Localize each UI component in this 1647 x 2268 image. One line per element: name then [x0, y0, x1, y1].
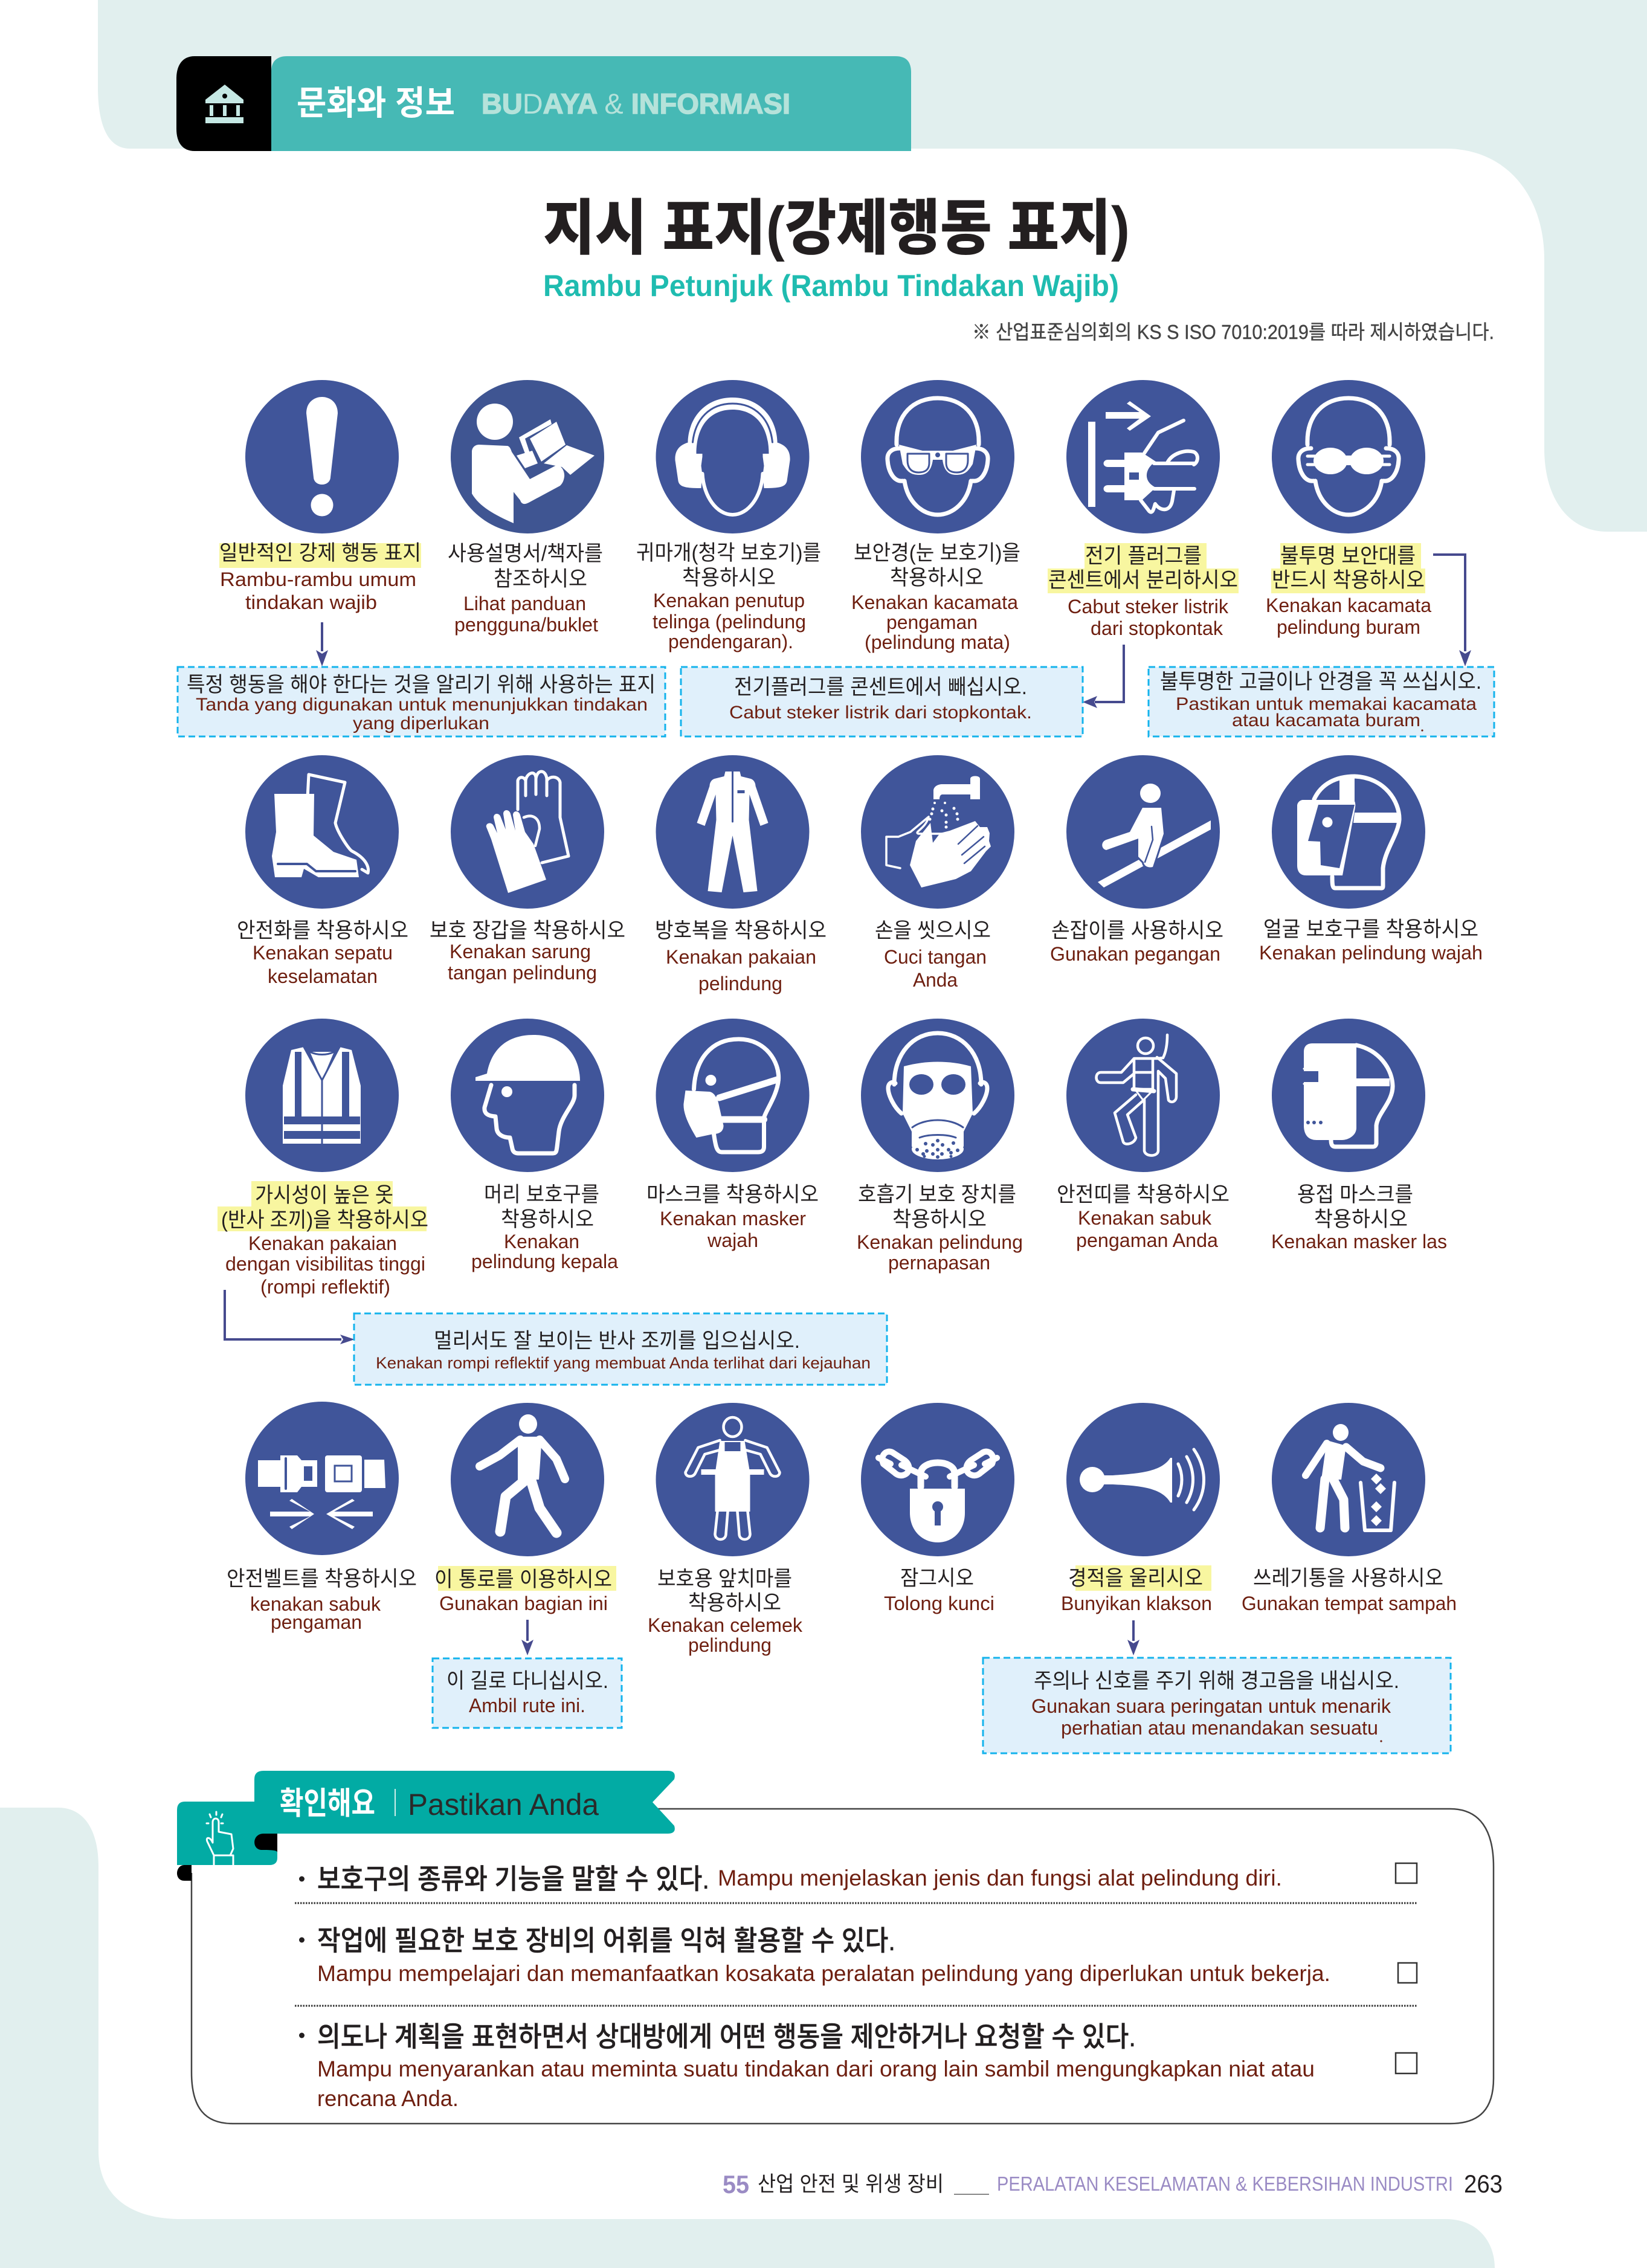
label: Kenakan pelindung wajah — [1259, 942, 1483, 964]
label: 마스크를 착용하시오 — [646, 1183, 819, 1206]
sign: use handrail — [1050, 755, 1223, 965]
label: 귀마개(청각 보호기)를 — [636, 541, 821, 565]
icon: face shield — [1272, 755, 1425, 909]
label: 착용하시오 — [682, 566, 776, 590]
sign: protective clothing — [655, 755, 827, 994]
checklist ribbon — [254, 1771, 675, 1834]
label: Gunakan tempat sampah — [1242, 1593, 1457, 1614]
label: (반사 조끼)을 착용하시오 — [221, 1208, 428, 1232]
arrow: opaque goggles to note — [1433, 555, 1471, 666]
icon: apron — [656, 1403, 810, 1556]
label: dengan visibilitas tinggi — [225, 1253, 425, 1275]
callout: unplug: 전기플러그를 콘센트에서 빼십시오. — [734, 675, 1027, 699]
label — [1050, 919, 1223, 965]
label: pelindung — [698, 973, 782, 994]
label: Kenakan sarung — [450, 941, 591, 962]
label: 착용하시오 — [688, 1591, 781, 1615]
label: pelindung — [688, 1634, 772, 1656]
footer: 55 — [723, 2170, 749, 2199]
label: 사용설명서/책자를 — [448, 542, 603, 565]
label: Kenakan — [504, 1231, 579, 1252]
icon: gas mask — [861, 1019, 1014, 1172]
label: 머리 보호구를 — [484, 1183, 599, 1206]
label: Kenakan masker las — [1271, 1231, 1447, 1252]
label — [851, 541, 1020, 653]
label highlight — [218, 1181, 427, 1231]
callout: horn: perhatian atau menandakan sesuatu — [1061, 1717, 1378, 1739]
sign: face protection — [1259, 755, 1483, 964]
label: Lihat panduan — [463, 593, 586, 614]
arrow: general sign to note — [316, 622, 328, 666]
label — [227, 1567, 417, 1633]
label highlight — [438, 1566, 616, 1591]
label: pendengaran). — [668, 631, 793, 652]
label: Kenakan pakaian — [248, 1232, 397, 1254]
icon: horn — [1066, 1403, 1220, 1556]
section title korean: 문화와 정보 — [297, 84, 455, 122]
callout: walkway: 이 길로 다니십시오. — [446, 1669, 608, 1693]
label — [1266, 544, 1431, 638]
label: tindakan wajib — [245, 591, 377, 613]
icon: reflective vest — [245, 1019, 399, 1172]
icon: person using trash bin — [1272, 1403, 1425, 1556]
label: 가시성이 높은 옷 — [255, 1184, 393, 1207]
callout: unplug: Cabut steker listrik dari stopkontak. — [729, 703, 1032, 723]
sign: high visibility clothing — [218, 1019, 428, 1298]
callout: opaque goggles: 불투명한 고글이나 안경을 꼭 쓰십시오. — [1160, 670, 1481, 694]
label — [471, 1183, 618, 1272]
label — [1259, 918, 1483, 964]
label: 안전띠를 착용하시오 — [1057, 1183, 1230, 1206]
callout: horn: Gunakan suara peringatan untuk menarik — [1031, 1695, 1391, 1717]
sign: lock — [861, 1403, 1014, 1614]
section header tab — [176, 56, 911, 151]
label: 콘센트에서 분리하시오 — [1048, 569, 1238, 592]
icon: exclamation mark — [245, 380, 399, 533]
panel: checklist — [177, 1771, 1494, 2124]
label — [434, 1568, 612, 1614]
label — [1271, 1183, 1447, 1252]
label: pengaman — [271, 1611, 362, 1633]
callout: walkway — [433, 1658, 622, 1728]
icon: hard hat — [451, 1019, 604, 1172]
label: kenakan sabuk — [250, 1593, 381, 1615]
callout: visibility: 멀리서도 잘 보이는 반사 조끼를 입으십시오. — [434, 1329, 800, 1353]
section title indonesian: BUDAYA & INFORMASI — [482, 88, 790, 120]
callout: visibility — [354, 1313, 887, 1385]
callout: visibility: Kenakan rompi reflektif yang membuat Anda terlihat dari kejauhan — [376, 1354, 871, 1372]
label — [875, 919, 991, 991]
label: Kenakan sabuk — [1078, 1207, 1212, 1229]
label — [221, 1184, 428, 1298]
background: top and right tint — [98, 0, 1647, 532]
label: 손잡이를 사용하시오 — [1051, 919, 1223, 942]
icon: face mask — [656, 1019, 810, 1172]
sign: use this walkway — [434, 1403, 616, 1614]
background: bottom and left tint — [0, 1808, 1495, 2268]
label: pengaman — [886, 611, 978, 633]
checklist item 3: Mampu menyarankan atau meminta suatu tindakan dari orang lain sambil mengungkapkan niat atau — [317, 2057, 1315, 2081]
label: 일반적인 강제 행동 표지 — [219, 541, 421, 565]
label: 손을 씻으시오 — [875, 919, 991, 942]
label — [430, 919, 625, 984]
checklist item 2: 작업에 필요한 보호 장비의 어휘를 익혀 활용할 수 있다. — [317, 1925, 895, 1956]
sign: respiratory protection — [857, 1019, 1023, 1274]
callout: opaque goggles: Pastikan untuk memakai kacamata — [1176, 694, 1477, 714]
icon: hand pulling plug from socket — [1066, 380, 1220, 533]
label — [448, 542, 603, 636]
label: 이 통로를 이용하시오 — [434, 1568, 612, 1591]
label — [648, 1567, 803, 1656]
sign: eye protection — [851, 380, 1020, 653]
label: 용접 마스크를 — [1297, 1183, 1413, 1206]
label: Gunakan bagian ini — [439, 1593, 608, 1614]
label: 보안경(눈 보호기)을 — [854, 541, 1020, 565]
label: Cabut steker listrik — [1068, 596, 1229, 617]
label: pengguna/buklet — [454, 614, 598, 636]
label: dari stopkontak — [1091, 617, 1223, 639]
label: wajah — [707, 1229, 758, 1251]
label: Cuci tangan — [884, 946, 987, 968]
checklist item 3: rencana Anda. — [317, 2086, 459, 2111]
callout: opaque goggles: atau kacamata buram — [1232, 710, 1420, 730]
sign: head protection — [451, 1019, 618, 1272]
label: (rompi reflektif) — [260, 1276, 390, 1298]
label: 참조하시오 — [494, 567, 587, 591]
label — [655, 919, 827, 994]
label: pelindung kepala — [471, 1251, 618, 1272]
label: keselamatan — [268, 965, 378, 987]
label: Kenakan masker — [660, 1208, 806, 1229]
arrow: horn to note — [1127, 1620, 1139, 1655]
label: 착용하시오 — [890, 566, 984, 590]
checklist ribbon: 확인해요 — [280, 1786, 375, 1822]
label: 착용하시오 — [892, 1208, 987, 1231]
label: 착용하시오 — [1314, 1208, 1408, 1231]
label: Kenakan penutup — [653, 590, 805, 611]
label — [1057, 1183, 1230, 1251]
callout: horn — [983, 1658, 1451, 1753]
label highlight — [1271, 543, 1425, 593]
sign: welding mask — [1271, 1019, 1447, 1252]
label: (pelindung mata) — [865, 631, 1010, 653]
label: 안전화를 착용하시오 — [237, 919, 408, 942]
label: 안전벨트를 착용하시오 — [227, 1567, 417, 1591]
label: pernapasan — [888, 1252, 990, 1274]
label: 반드시 착용하시오 — [1272, 569, 1425, 592]
icon: opaque goggles — [1272, 380, 1425, 533]
icon: padlock and chain — [861, 1403, 1014, 1556]
callout: general sign: 특정 행동을 해야 한다는 것을 알리기 위해 사용하는 표지 — [187, 673, 656, 697]
label: 잠그시오 — [900, 1567, 974, 1590]
sign: protective apron — [648, 1403, 810, 1656]
sign: safety harness — [1057, 1019, 1230, 1251]
arrow: walkway to note — [521, 1620, 533, 1655]
icon: harness — [1066, 1019, 1220, 1172]
label — [1242, 1567, 1457, 1614]
icon: boot — [245, 755, 399, 909]
label: Rambu-rambu umum — [220, 569, 416, 590]
label: 전기 플러그를 — [1085, 544, 1202, 568]
icon: hand washing — [861, 755, 1014, 909]
icon: welding mask — [1272, 1019, 1425, 1172]
sign: mask — [646, 1019, 819, 1251]
label: Kenakan pelindung — [857, 1231, 1023, 1253]
label — [636, 541, 821, 652]
callout: walkway: Ambil rute ini. — [469, 1695, 585, 1716]
label: telinga (pelindung — [653, 611, 806, 633]
icon: museum on black tab — [176, 56, 271, 151]
sign: ear protection — [636, 380, 821, 652]
callout: general sign — [178, 667, 665, 736]
label highlight — [219, 543, 421, 568]
footer: 263 — [1464, 2170, 1503, 2198]
checklist item 1: 보호구의 종류와 기능을 말할 수 있다. — [317, 1863, 709, 1895]
label: 착용하시오 — [501, 1208, 594, 1231]
label: Kenakan pakaian — [666, 946, 816, 968]
sign: seat belt — [227, 1402, 417, 1633]
icon: person reading book — [451, 380, 604, 533]
label: 얼굴 보호구를 착용하시오 — [1263, 918, 1478, 941]
sign: wash hands — [861, 755, 1014, 991]
label: 불투명 보안대를 — [1280, 544, 1416, 568]
label: Anda — [913, 969, 958, 991]
label: pengaman Anda — [1076, 1229, 1218, 1251]
sign: opaque eye protection — [1266, 380, 1431, 638]
label — [646, 1183, 819, 1251]
panel outline — [192, 1809, 1494, 2124]
subtitle: Rambu Petunjuk (Rambu Tindakan Wajib) — [543, 269, 1119, 303]
label: Kenakan kacamata — [851, 591, 1018, 613]
label: 호흡기 보호 장치를 — [858, 1183, 1016, 1206]
footer — [723, 2170, 1503, 2199]
checklist tab with hand icon — [177, 1802, 277, 1881]
checklist item 2 — [299, 1925, 1417, 1986]
icon: walking person — [451, 1403, 604, 1556]
label: Tolong kunci — [884, 1593, 994, 1614]
label: 방호복을 착용하시오 — [655, 919, 827, 942]
label — [237, 919, 408, 987]
sign: read manual — [448, 380, 604, 636]
icon: safety goggles — [861, 380, 1014, 533]
label — [1061, 1567, 1212, 1614]
icon: seat belt — [245, 1402, 399, 1555]
checklist item 3 — [299, 2021, 1417, 2111]
footer: 산업 안전 및 위생 장비 — [758, 2173, 944, 2196]
label — [857, 1183, 1023, 1274]
callout: unplug — [681, 667, 1083, 736]
label: tangan pelindung — [448, 962, 597, 984]
title: 지시 표지(강제행동 표지) — [543, 195, 1130, 262]
sign: general mandatory action — [219, 380, 421, 613]
callout: opaque goggles — [1149, 667, 1494, 736]
icon: person holding handrail — [1066, 755, 1220, 909]
checklist ribbon: Pastikan Anda — [408, 1788, 599, 1822]
label: Kenakan kacamata — [1266, 594, 1431, 616]
label highlight — [1075, 1565, 1211, 1591]
icon: coverall — [656, 755, 810, 909]
label: pelindung buram — [1277, 616, 1420, 638]
sign: safety boots — [237, 755, 408, 987]
sign: protective gloves — [430, 755, 625, 984]
sign: use bin — [1242, 1403, 1457, 1614]
label: 쓰레기통을 사용하시오 — [1253, 1567, 1443, 1590]
source note: ※ 산업표준심의회의 KS S ISO 7010:2019를 따라 제시하였습니다. — [972, 321, 1494, 343]
checklist item 1: Mampu menjelaskan jenis dan fungsi alat pelindung diri. — [718, 1866, 1282, 1890]
checklist item 1 — [299, 1863, 1417, 1895]
sign: unplug — [1048, 380, 1239, 639]
label: Kenakan celemek — [648, 1614, 803, 1636]
callout: general sign: yang diperlukan — [353, 714, 489, 733]
checklist item 3: 의도나 계획을 표현하면서 상대방에게 어떤 행동을 제안하거나 요청할 수 있다. — [317, 2021, 1136, 2052]
label: Gunakan pegangan — [1050, 943, 1220, 965]
icon: gloves — [451, 755, 604, 909]
label — [884, 1567, 994, 1614]
label highlight — [1048, 543, 1239, 593]
label — [219, 541, 421, 613]
label: 경적을 울리시오 — [1068, 1567, 1203, 1590]
label: Bunyikan klakson — [1061, 1593, 1212, 1614]
checklist item 2: Mampu mempelajari dan memanfaatkan kosakata peralatan pelindung yang diperlukan untuk bekerja. — [317, 1961, 1330, 1986]
label: 보호 장갑을 착용하시오 — [430, 919, 625, 942]
arrow: visibility to note — [225, 1290, 355, 1344]
footer: PERALATAN KESELAMATAN & KEBERSIHAN INDUSTRI — [997, 2173, 1453, 2195]
arrow: unplug to note — [1083, 645, 1124, 708]
label — [1048, 544, 1238, 639]
teal tab background — [271, 56, 911, 151]
callout: general sign: Tanda yang digunakan untuk menunjukkan tindakan — [196, 695, 648, 715]
sign: sound horn — [1061, 1403, 1220, 1614]
icon: ear muffs — [656, 380, 810, 533]
label: 보호용 앞치마를 — [657, 1567, 792, 1591]
label: Kenakan sepatu — [253, 942, 393, 964]
callout: horn: 주의나 신호를 주기 위해 경고음을 내십시오. — [1034, 1669, 1399, 1693]
